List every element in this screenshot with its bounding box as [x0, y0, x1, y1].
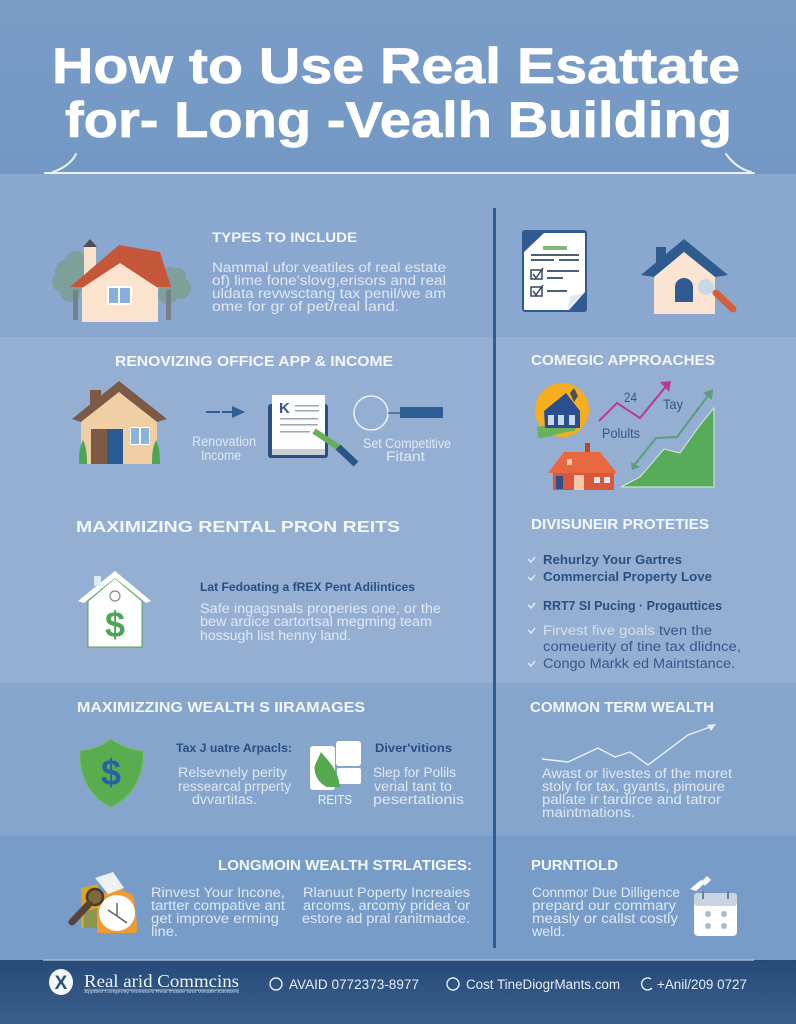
text block: portfolio body: prepard our commary: [532, 898, 676, 913]
chart: pink trend line: 24: [624, 390, 637, 405]
text block: portfolio body: [531, 885, 680, 939]
label: set competitive: Set Competitive: [363, 436, 451, 451]
text block: tax body: ressearcal prrperty: [178, 779, 291, 794]
label: renovation income: [192, 434, 256, 463]
panel: types band: [0, 174, 796, 337]
heading: common term wealth: COMMON TERM WEALTH: [530, 700, 714, 716]
text block: rental body: [200, 601, 441, 643]
icon: house with trees: [52, 239, 191, 322]
icon: document with magnifier: [268, 395, 356, 464]
text block: types body: ome for gr of pet/real land.: [212, 299, 399, 314]
checklist: Commercial Property Love: [543, 569, 712, 584]
text block: wealth body: pallate ir tardirce and tatror: [542, 792, 722, 807]
text block: strategies column two: Rlanuut Poperty Increaies: [303, 885, 470, 900]
chart: green growth area: [621, 389, 714, 487]
checklist: comeuerity of tine tax dlidnce,: [543, 639, 741, 654]
subheading: tax: Tax J uatre Arpacls:: [176, 741, 292, 755]
panel: renovating and rental band: [0, 337, 796, 683]
text block: types body: Nammal ufor veatiles of real estate: [212, 260, 446, 275]
title: for- Long -Vealh Building: [65, 92, 732, 148]
panel: diversifying properties: [528, 517, 741, 671]
text block: strategies column one: Rinvest Your Incone,: [151, 885, 285, 900]
text block: strategies column two: [302, 885, 471, 926]
heading: maximizing wealth: MAXIMIZZING WEALTH S IIRAMAGES: [77, 700, 365, 716]
heading: types to include: TYPES TO INCLUDE: [212, 230, 357, 245]
icon: REITS pie tile: [310, 741, 361, 807]
text block: tax body: dvvartitas.: [192, 792, 257, 807]
icon: magnifying glass: [354, 396, 443, 430]
label: renovation income: Renovation: [192, 434, 256, 449]
label: set competitive: [363, 436, 451, 464]
checklist: Firvest five goals tven the: [543, 623, 712, 638]
footer contact: website: Cost TineDiogrMants.com: [466, 977, 620, 992]
text block: strategies column one: line.: [151, 924, 178, 939]
icon: magnifier and clock: [72, 872, 137, 933]
text block: strategies column one: [151, 885, 285, 939]
title underline bracket: [45, 154, 754, 173]
icon: house with magnifier: [641, 239, 733, 314]
checklist: Congo Markk ed Maintstance.: [543, 656, 735, 671]
panel: document and house inspection icons: [522, 230, 733, 314]
text block: portfolio body: weld.: [531, 924, 565, 939]
text block: rental body: bew ardice cartortsal megming team: [200, 614, 432, 629]
text block: diversification body: pesertationis: [373, 792, 464, 807]
chart: wealth line: [542, 724, 716, 765]
text block: strategies column two: arcoms, arcomy pridea 'or: [303, 898, 471, 913]
icon: house in sun: [535, 383, 589, 438]
heading: maximizing rental: MAXIMIZING RENTAL PRON REITS: [76, 519, 400, 536]
chart: pink trend line: Polults: [602, 426, 640, 441]
subheading: rental: Lat Fedoating a fREX Pent Adilintices: [200, 580, 415, 594]
text block: tax body: [178, 765, 291, 807]
checklist: [528, 552, 741, 671]
panel: footer: [0, 960, 796, 1024]
icon: calendar and pen: [690, 876, 737, 936]
text block: strategies column one: tartter compative ant: [151, 898, 285, 913]
panel: strategic approaches: [531, 353, 715, 490]
footer contact: date: +Anil/209 0727: [657, 977, 747, 992]
heading: strategies: LONGMOIN WEALTH STRLATIGES:: [218, 858, 472, 874]
text block: diversification body: verial tant to: [374, 779, 452, 794]
chart: pink trend line: Tay: [663, 397, 683, 412]
icon: logo badge: X: [55, 973, 68, 994]
panel: maximizing wealth: [77, 700, 464, 807]
footer brand: Applied Longevity Investors Real Estate and Wealth Advisers: [84, 989, 239, 994]
label: set competitive: Fitant: [386, 449, 425, 464]
heading: diversifying: DIVISUNEIR PROTETIES: [531, 517, 709, 533]
icon: checklist document: [522, 230, 587, 312]
subheading: diversification: Diver'vitions: [375, 741, 452, 755]
text block: rental body: hossugh list henny land.: [200, 628, 351, 643]
text block: types body: of) lime fone'slovg,erisors and real: [212, 273, 446, 288]
text block: types body: [212, 260, 446, 314]
panel: header band: [0, 0, 796, 174]
vertical divider: [493, 208, 496, 948]
arrow: renovation flow: [206, 406, 245, 418]
checklist: RRT7 SI Pucing · Progauttices: [543, 598, 722, 613]
text block: portfolio body: measly or callst costly: [532, 911, 678, 926]
checklist: Rehurlzy Your Gartres: [543, 552, 682, 567]
panel: portfolio: [531, 858, 737, 939]
text block: diversification body: Slep for Polils: [373, 765, 456, 780]
icon: house with dollar: [78, 571, 151, 647]
heading: approaches: COMEGIC APPROACHES: [531, 353, 715, 369]
icon: house with dollar: $: [105, 604, 125, 645]
text block: wealth body: Awast or livestes of the moret: [542, 766, 732, 781]
text block: tax body: Relsevnely perity: [178, 765, 287, 780]
panel: wealth band: [0, 683, 796, 836]
text block: wealth body: stoly for tax, gyants, pimoure: [542, 779, 725, 794]
icon: document with magnifier: K: [279, 400, 290, 417]
heading: portfolio: PURNTIOLD: [531, 858, 618, 874]
footer brand: Real arid Commcins: [84, 971, 239, 991]
icon: logo badge: [49, 969, 73, 995]
text block: strategies column two: estore ad pral ranitmadce.: [302, 911, 470, 926]
text block: diversification body: [373, 765, 464, 807]
panel: types to include: [52, 230, 446, 322]
panel: long-term strategies band: [0, 836, 796, 960]
title: How to Use Real Esattate: [52, 38, 740, 94]
icon: REITS pie tile: REITS: [318, 793, 352, 807]
text block: wealth body: [542, 766, 732, 820]
title: [52, 38, 740, 148]
footer contact: phone: AVAID 0772373-8977: [289, 977, 419, 992]
panel: long-term wealth strategies: [72, 858, 472, 939]
chart: pink trend line: [599, 381, 683, 441]
panel: maximizing rental: [76, 519, 441, 647]
text block: portfolio body: Connmor Due Dilligence: [532, 885, 680, 900]
icon: brown roof house: [72, 381, 167, 464]
icon: green shield: $: [101, 752, 121, 793]
text block: strategies column one: get improve erming: [151, 911, 279, 926]
text block: types body: uldata revwsctang tax penil/we am: [212, 286, 446, 301]
panel: common term wealth: [530, 700, 732, 820]
text block: rental body: Safe ingagsnals properies one, or the: [200, 601, 441, 616]
heading: renovating: RENOVIZING OFFICE APP & INCOME: [115, 354, 393, 370]
label: renovation income: Income: [201, 448, 241, 463]
icon: red house: [548, 443, 617, 490]
icon: green shield: [80, 739, 143, 807]
panel: renovating: [72, 354, 451, 464]
text block: wealth body: maintmations.: [542, 805, 635, 820]
